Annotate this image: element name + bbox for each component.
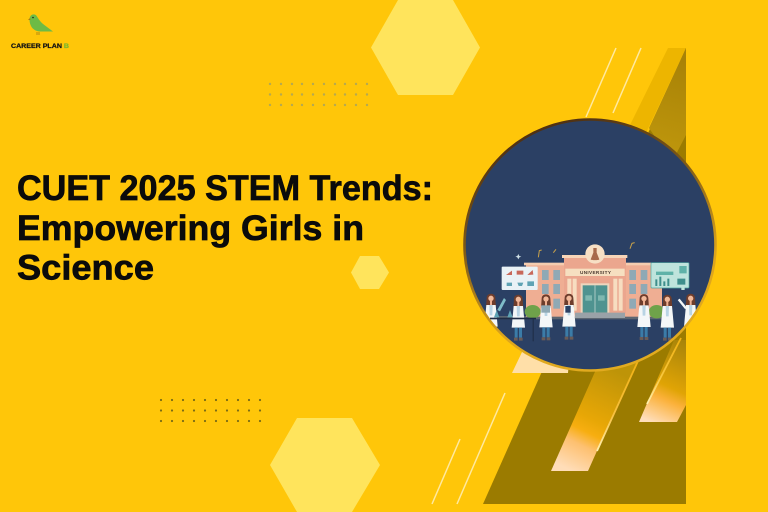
raised arm of scientist 7: [679, 299, 686, 308]
title: Empowering Girls in: [17, 209, 364, 248]
highlight line: left strip: [597, 350, 643, 451]
hexagon: top: [371, 0, 480, 95]
scientist 5: [637, 294, 651, 340]
door: [581, 283, 609, 313]
microscope: [497, 298, 506, 311]
lab table: [490, 310, 536, 341]
hexagon: small centre: [351, 256, 389, 289]
columns: [567, 279, 623, 311]
scientist 7: [684, 294, 696, 326]
scientist 4: [562, 294, 576, 340]
chart panel: right: [651, 263, 689, 290]
bushes: [525, 305, 665, 318]
logo text: CAREER PLAN B: [11, 43, 69, 50]
dot grid: top: [269, 83, 368, 106]
thin diagonal lines: top: [586, 48, 641, 117]
circle illustration: [464, 120, 716, 370]
title: Science: [17, 248, 154, 288]
logo: [11, 14, 69, 50]
title: [17, 169, 433, 288]
light gold band: [630, 48, 686, 135]
scientist 3: [539, 294, 553, 340]
university scene: [484, 243, 697, 341]
peach strip: right: [639, 340, 686, 422]
central block: [564, 258, 626, 266]
peach triangle under circle: [512, 350, 570, 373]
music notes: [538, 243, 635, 257]
title: CUET 2025 STEM Trends:: [17, 169, 433, 208]
ground strip: [493, 316, 667, 319]
scientist 1: [486, 294, 498, 327]
scientist 6: [661, 295, 674, 341]
scientists: [484, 294, 697, 341]
flask emblem: [585, 244, 605, 264]
building windows: [542, 270, 647, 309]
university sign: UNIVERSITY: [580, 270, 612, 275]
steps: [575, 313, 625, 318]
thin diagonal lines: bottom: [432, 393, 505, 504]
clipboard: [541, 305, 550, 313]
mid gold wedge: [649, 48, 686, 162]
dark gold triangle: [483, 48, 686, 504]
tablet: [565, 306, 571, 313]
sparkle: [515, 254, 521, 259]
highlight line: right strip: [647, 338, 681, 404]
scientist 2: [512, 295, 525, 341]
chart panel: left: [502, 267, 538, 290]
circle background: [465, 120, 715, 370]
building wings: [526, 264, 662, 317]
hexagon: bottom: [270, 418, 380, 512]
peach strip: left: [551, 355, 640, 471]
angular shapes behind circle: [483, 48, 686, 504]
circle ring: [464, 120, 716, 370]
icon: green bird: [28, 14, 53, 35]
dot grid: bottom: [160, 399, 261, 422]
